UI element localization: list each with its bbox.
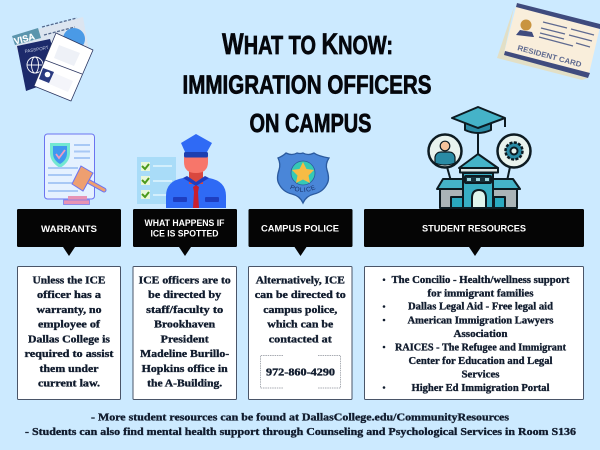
panel: campus police text: contacted at: [269, 334, 332, 346]
icon: passport and visa: PASSPORT: [24, 45, 49, 54]
panel: student resources list: Dallas Legal Aid - Free legal aid: [408, 302, 553, 313]
panel: campus police text: can be directed to: [255, 290, 346, 301]
panel: campus police text: Alternatively, ICE: [256, 275, 345, 286]
panel: student resources list: Center for Education and Legal: [408, 356, 553, 367]
panel: warrants text: them under: [40, 364, 99, 375]
icon: resident card: RESIDENT CARD: [516, 43, 583, 69]
panel: student resources list: for immigrant families: [428, 288, 534, 299]
panel: what happens text: Madeline Burillo-: [140, 349, 230, 360]
label: what happens if ice is spotted: ICE IS SPOTTED: [150, 228, 219, 238]
footer notes: [25, 412, 576, 438]
title: [182, 28, 432, 138]
label: campus police: [248, 209, 352, 256]
panel: campus police text: [248, 266, 352, 400]
panel: what happens text: [133, 266, 236, 400]
icon: officer with checklist: [137, 134, 226, 208]
panel: what happens text: Brookhaven: [154, 320, 215, 331]
panel: what happens text: Hopkins office in: [142, 364, 228, 375]
panel: what happens text: ICE officers are to: [139, 275, 231, 286]
label: student resources: STUDENT RESOURCES: [422, 224, 526, 234]
label: campus police: CAMPUS POLICE: [261, 224, 339, 234]
panel: warrants text: employee of: [38, 320, 101, 331]
icon: warrant document and gavel: [44, 134, 104, 204]
title: ON CAMPUS: [250, 108, 372, 138]
icon: school with graduation cap: [428, 107, 530, 208]
panel: student resources list: Services: [462, 370, 500, 380]
label: warrants: WARRANTS: [41, 224, 97, 234]
panel: student resources list: [364, 266, 584, 400]
panel: campus police text: which can be: [267, 320, 334, 331]
icon: passport and visa: VISA: [13, 31, 36, 46]
title: IMMIGRATION OFFICERS: [182, 70, 432, 100]
label: warrants: [17, 209, 121, 256]
panel: what happens text: staff/faculty to: [146, 305, 223, 316]
footer notes: - More student resources can be found at DallasCollege.edu/CommunityResources: [91, 412, 509, 424]
panel: warrants text: required to assist: [24, 349, 114, 360]
panel: student resources list: RAICES - The Refugee and Immigrant: [395, 342, 566, 353]
label: what happens if ice is spotted: WHAT HAPPENS IF: [144, 218, 225, 228]
panel: campus police text: campus police,: [263, 305, 338, 316]
icon: resident card: [497, 3, 600, 80]
panel: warrants text: Unless the ICE: [32, 275, 106, 286]
panel: warrants text: current law.: [38, 378, 100, 390]
label: what happens if ice is spotted: [133, 209, 237, 256]
icon: passport and visa: [12, 17, 93, 101]
panel: warrants text: Dallas College is: [28, 334, 110, 346]
panel: what happens text: President: [161, 334, 209, 346]
panel: warrants text: officer has a: [37, 290, 102, 301]
panel: student resources list: Association: [454, 329, 508, 340]
panel: warrants text: [18, 266, 120, 400]
panel: what happens text: the A-Building.: [147, 378, 223, 390]
panel: student resources list: The Concilio - Health/wellness support: [392, 275, 570, 286]
icon: police badge: [276, 152, 330, 204]
panel: student resources list: American Immigration Lawyers: [408, 315, 554, 326]
title: WHAT TO KNOW:: [222, 28, 393, 61]
panel: warrants text: warranty, no: [36, 305, 102, 316]
panel: what happens text: be directed by: [148, 290, 222, 301]
icon: police badge: POLICE: [290, 184, 316, 192]
panel: student resources list: Higher Ed Immigration Portal: [412, 383, 550, 394]
footer notes: - Students can also find mental health support through Counseling and Psychological Services in Room S136: [25, 427, 576, 438]
panel: campus police text: 972-860-4290: [266, 368, 335, 378]
label: student resources: [364, 209, 584, 256]
